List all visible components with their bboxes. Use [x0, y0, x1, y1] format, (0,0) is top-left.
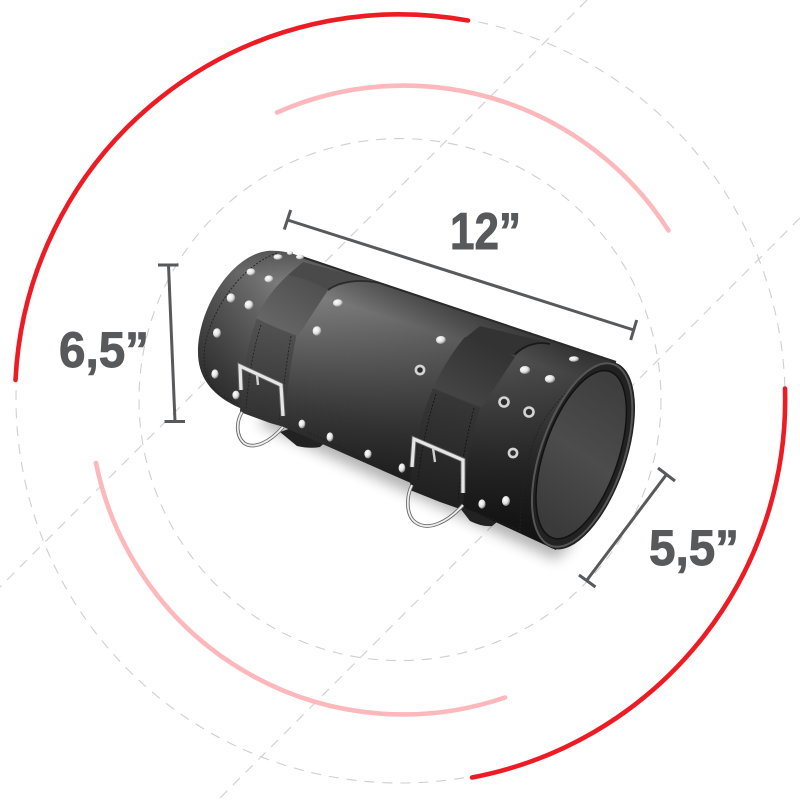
left D-ring — [238, 412, 283, 446]
label: width: 5,5” — [649, 520, 739, 576]
right D-ring — [408, 485, 463, 526]
eyelets — [415, 365, 535, 458]
red arc: lower right — [472, 388, 785, 778]
left strap — [240, 262, 380, 427]
metal studs — [211, 251, 579, 509]
label: height: 6,5” — [59, 322, 149, 378]
red arc: upper left — [16, 14, 468, 380]
length dimension line — [284, 210, 637, 340]
product: leather roll bag — [198, 251, 656, 562]
soft shadow — [260, 405, 575, 560]
left strap keeper — [256, 275, 328, 336]
pink arc: upper — [277, 86, 668, 230]
bottom mounting tabs — [280, 425, 502, 526]
height dimension line — [158, 265, 185, 422]
cylinder body — [198, 251, 616, 550]
stitching — [204, 253, 613, 532]
right buckle — [412, 439, 463, 493]
width dimension line — [579, 468, 675, 587]
right strap keeper — [433, 337, 515, 407]
left buckle — [240, 366, 283, 416]
right strap — [410, 326, 550, 510]
end cap rim — [511, 349, 656, 562]
pink arc: lower — [96, 463, 505, 714]
label: length: 12” — [450, 203, 521, 261]
